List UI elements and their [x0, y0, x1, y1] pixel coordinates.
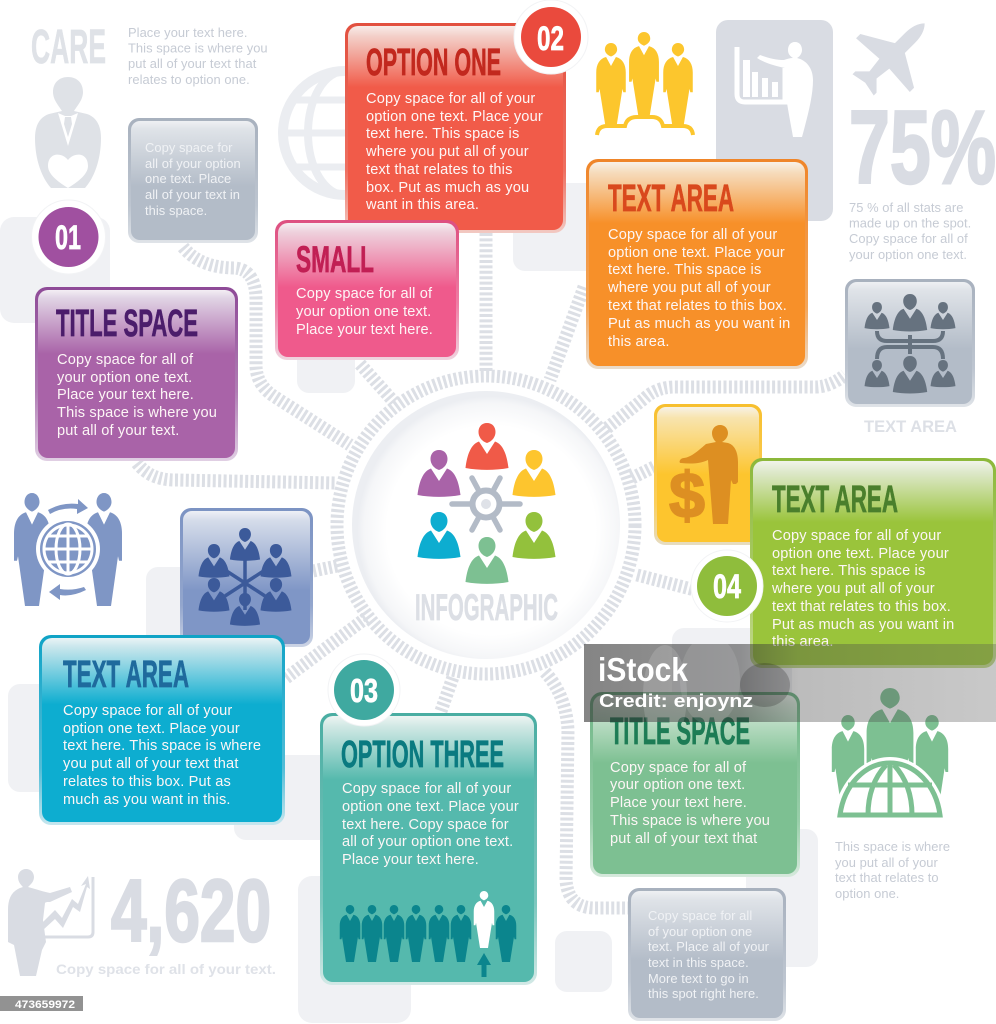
text block: care: relates to option one.: [128, 72, 250, 87]
central icon: people around a wheel: [418, 423, 556, 584]
body text: where you put all of your: [771, 581, 935, 597]
heading: care: CARE: [31, 21, 106, 74]
text block: care: This space is where you: [128, 40, 268, 56]
body text: option one text. Place your: [63, 721, 240, 737]
heading: OPTION THREE: [341, 734, 504, 776]
panel: text area green: [750, 458, 996, 668]
text block: globe: option one.: [835, 886, 899, 901]
heading: SMALL: [296, 239, 374, 280]
body text: Place your text here.: [610, 795, 747, 811]
panel: option one red: [345, 23, 566, 233]
body text: Place your text here.: [342, 852, 479, 868]
watermark band: [584, 644, 996, 722]
panel: text area cyan: [39, 635, 285, 825]
panel: text area orange: [586, 159, 808, 369]
heading: TEXT AREA: [63, 654, 189, 696]
body text: want in this area.: [365, 197, 479, 213]
body text: Copy space for all of your: [772, 528, 941, 544]
heading: TEXT AREA: [772, 479, 898, 521]
central title: INFOGRAPHIC: [415, 587, 558, 628]
watermark logo: iStock: [598, 651, 689, 688]
note text: of your option one: [648, 924, 752, 939]
body text: Place your text here.: [57, 387, 194, 403]
body text: text here. This space is: [608, 262, 761, 278]
body text: Copy space for all of your: [366, 91, 535, 107]
background panel: presenter with chart: [716, 20, 833, 221]
background globe: [281, 71, 407, 195]
badge: 02: [514, 0, 588, 74]
badge: 01: [32, 200, 106, 274]
body text: relates to this box. Put as: [63, 774, 231, 790]
badge: 04: 04: [713, 568, 741, 606]
icon: three people behind globe: [832, 688, 948, 822]
panel: option three teal: [320, 713, 537, 985]
panel: blue network icon: [180, 508, 313, 647]
badge: 03: [328, 654, 400, 726]
text block: stat: made up on the spot.: [849, 216, 971, 230]
heading: TITLE SPACE: [610, 711, 750, 753]
note text: all of your text in: [145, 187, 240, 202]
body text: this area.: [772, 634, 834, 650]
body text: option one text. Place your: [772, 546, 949, 562]
body text: where you put all of your: [607, 280, 771, 296]
text block: stat: 75 % of all stats are: [849, 200, 963, 215]
text block: stat: Copy space for all of: [849, 231, 968, 246]
body text: where you put all of your: [365, 144, 529, 160]
body text: This space is where you: [610, 813, 770, 829]
heading: TEXT AREA: [608, 178, 734, 220]
note text: all of your option: [145, 156, 241, 171]
body text: box. Put as much as you: [366, 180, 529, 196]
watermark credit: Credit: enjoynz: [599, 691, 753, 711]
body text: Place your text here.: [296, 322, 433, 338]
panel: title space sea green: [590, 692, 800, 877]
central disc: [352, 391, 620, 659]
note text: Copy space for all: [648, 908, 752, 923]
body text: text here. Copy space for: [342, 817, 509, 833]
connector tracks: [137, 233, 845, 908]
body text: text that relates to this box.: [772, 599, 951, 615]
panel: yellow dollar icon: [654, 404, 762, 545]
icon: row of people: [340, 891, 516, 977]
body text: Copy space for all of your: [63, 703, 232, 719]
note text: text in this space.: [648, 955, 749, 970]
body text: put all of your text.: [57, 423, 179, 439]
body text: Copy space for all of your: [608, 227, 777, 243]
body text: text that relates to this box.: [608, 298, 787, 314]
image id tag: 473659972: [15, 999, 75, 1011]
body text: Copy space for all of: [296, 286, 433, 302]
panel: lower grey note: [628, 888, 786, 1021]
panel: yellow dollar icon: $: [669, 459, 705, 531]
panel: grey network icon: [845, 279, 975, 407]
text block: globe: This space is where: [835, 839, 950, 854]
heading: OPTION ONE: [366, 42, 501, 84]
body text: This space is where you: [57, 405, 217, 421]
text block: stat: your option one text.: [849, 247, 967, 262]
badge: 03: 03: [350, 672, 378, 709]
body text: option one text. Place your: [342, 799, 519, 815]
body text: put all of your text that: [610, 831, 757, 847]
body text: text here. This space is: [772, 563, 925, 579]
body text: text here. This space is: [366, 126, 519, 142]
body text: text that relates to this: [366, 162, 513, 178]
text block: globe: text that relates to: [835, 870, 939, 885]
note text: this space.: [145, 203, 207, 218]
icon: three people on podium: [596, 32, 693, 135]
panel: small grey note: [128, 118, 258, 243]
body text: Put as much as you want in: [772, 617, 954, 633]
background rounded squares: [0, 183, 818, 1023]
note text: this spot right here.: [648, 986, 759, 1001]
body text: Copy space for all of: [57, 352, 194, 368]
body text: Put as much as you want in: [608, 316, 790, 332]
badge: 02: 02: [537, 20, 564, 58]
body text: Copy space for all of your: [342, 781, 511, 797]
panel: title space purple: [35, 287, 238, 461]
body text: you put all of your text that: [63, 756, 239, 772]
body text: your option one text.: [610, 777, 745, 793]
body text: your option one text.: [57, 370, 192, 386]
body text: much as you want in this.: [63, 792, 231, 808]
icon: person holding heart: [35, 77, 101, 188]
body text: your option one text.: [296, 304, 431, 320]
icon: airplane: [836, 0, 952, 112]
body text: Copy space for all of: [610, 760, 747, 776]
body text: this area.: [608, 334, 670, 350]
note text: one text. Place: [145, 171, 231, 186]
note text: Copy space for: [145, 140, 233, 155]
text block: care: Place your text here.: [128, 25, 248, 40]
badge: 04: [691, 550, 763, 622]
body text: option one text. Place your: [366, 109, 543, 125]
image id tag: [0, 996, 83, 1011]
icon: two people and globe: [14, 493, 122, 606]
body text: text here. This space is where: [63, 738, 261, 754]
big stat: 4,620: 4,620: [111, 861, 271, 960]
note text: More text to go in: [648, 971, 749, 986]
stat caption: Copy space for all of your text.: [56, 961, 276, 977]
note text: text. Place all of your: [648, 939, 770, 954]
body text: option one text. Place your: [608, 245, 785, 261]
panel: small pink: [275, 220, 459, 360]
heading: TITLE SPACE: [56, 303, 198, 345]
text block: globe: you put all of your: [835, 855, 939, 870]
central ring: [337, 376, 635, 674]
icon: presenter with rising chart: [8, 869, 93, 976]
text block: care: put all of your text that: [128, 56, 257, 71]
body text: all of your option one text.: [342, 834, 513, 850]
badge: 01: 01: [55, 219, 81, 257]
caption: text area: TEXT AREA: [864, 417, 957, 436]
